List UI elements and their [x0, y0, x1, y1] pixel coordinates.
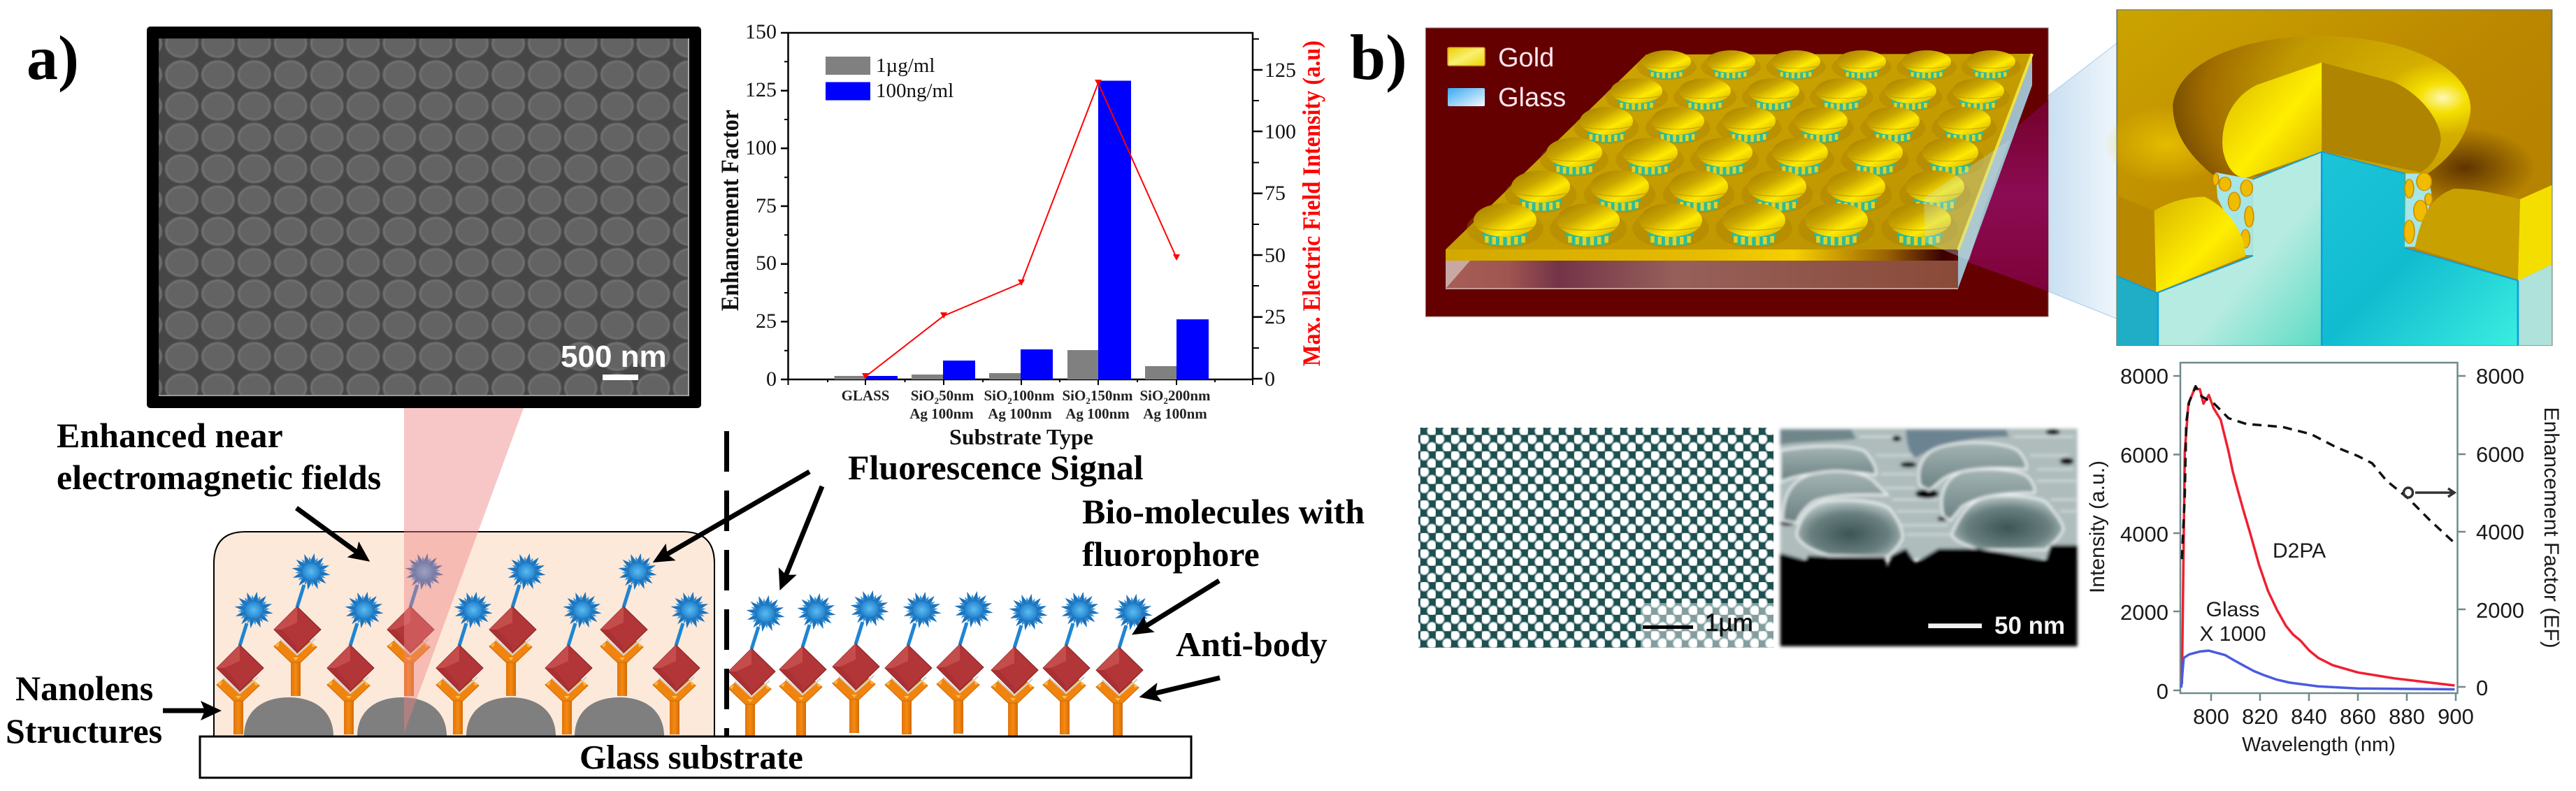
scale text 1 um: 1µm: [1705, 609, 1753, 637]
left axis numbers: 150: [745, 20, 777, 43]
nanolens biosensor schematic: [6, 408, 1365, 778]
legend gold: [1448, 43, 1554, 73]
left axis numbers: 4000: [2120, 522, 2168, 546]
arrow: enhanced fields: [296, 508, 359, 553]
left axis numbers: 50: [756, 252, 777, 275]
glass x 1000 label: Glass: [2206, 598, 2259, 621]
legend glass: [1448, 83, 1566, 113]
glass centre left: [2158, 152, 2322, 345]
right axis numbers: [2476, 364, 2524, 700]
x axis numbers: 840: [2291, 704, 2327, 729]
right axis numbers: [1265, 59, 1296, 391]
category labels: 2: [935, 396, 939, 406]
legend: 100ng/ml: [876, 80, 954, 102]
electric field line: [862, 80, 1180, 379]
category labels: SiO: [911, 387, 935, 404]
label: bio-molecules with fluorophore: Bio-molecules with: [1082, 492, 1365, 531]
x axis numbers: 800: [2193, 704, 2229, 729]
top-view SEM of D2PA: [1418, 428, 1773, 648]
neck left with nanoparticles: [2212, 173, 2254, 255]
bio-molecules on nanolens: [217, 550, 712, 734]
label: enhanced near electromagnetic fields: electromagnetic fields: [57, 458, 381, 497]
label: enhanced near electromagnetic fields: Enhanced near: [57, 416, 283, 455]
lower gold far right: [2518, 185, 2552, 281]
translucent cone origin on plate: [1924, 140, 2010, 261]
D2PA red curve: [2182, 389, 2454, 685]
arrow: anti-body: [1153, 678, 1220, 694]
D2PA label: D2PA: [2273, 539, 2326, 563]
blue zoom cone to inset: [2048, 43, 2117, 319]
category labels: [842, 387, 1211, 422]
right axis numbers: 50: [1265, 244, 1286, 267]
right axis numbers: 75: [1265, 182, 1286, 205]
x axis numbers: 900: [2438, 704, 2474, 729]
x axis numbers: 820: [2242, 704, 2278, 729]
legend glass: Glass: [1498, 83, 1566, 113]
glass front side: [1446, 261, 1958, 289]
nanolens domes: [244, 697, 664, 736]
lower gold right: [2415, 189, 2520, 280]
plot frame and ticks: [2173, 363, 2466, 701]
zoom cone to SEM: [404, 408, 524, 733]
label: bio-molecules with fluorophore: [1082, 492, 1365, 574]
x axis title: Substrate Type: [949, 424, 1093, 449]
right axis title: Max. Electric Field Intensity (a.u): [1297, 41, 1325, 366]
left axis numbers: 125: [745, 78, 777, 101]
glass far right: [2518, 264, 2552, 345]
glass right side: [1958, 54, 2032, 289]
lower gold left front: [2154, 197, 2245, 292]
curves: [2181, 386, 2454, 689]
gold domes: [1467, 50, 2021, 248]
arrow: bio-molecules: [1144, 581, 1219, 627]
left axis numbers: 2000: [2120, 600, 2168, 625]
category labels: Ag 100nm: [909, 405, 974, 422]
category labels: SiO: [984, 387, 1007, 404]
lower gold left side: [2117, 196, 2156, 292]
label: nanolens structures: Nanolens: [15, 669, 153, 708]
bars: [835, 81, 1209, 379]
gold top surface: [1446, 54, 2032, 250]
label: fluorescence signal: Fluorescence Signal: [848, 448, 1144, 487]
category labels: SiO: [1062, 387, 1086, 404]
label: enhanced near electromagnetic fields: [57, 416, 381, 497]
label: nanolens structures: [6, 669, 162, 750]
x axis title: Wavelength (nm): [2242, 734, 2396, 756]
x axis numbers: 880: [2389, 704, 2425, 729]
bio-molecules on glass: [728, 587, 1156, 738]
right axis numbers: 8000: [2476, 364, 2524, 389]
enhanced field region: [214, 532, 714, 736]
right axis numbers: 125: [1265, 59, 1296, 82]
tilted SEM of D2PA pillars: [1780, 428, 2078, 646]
right axis numbers: 25: [1265, 305, 1286, 328]
right axis title: Enhancement Factor (EF): [2540, 407, 2563, 648]
category labels: Ag 100nm: [1143, 405, 1207, 422]
panel a label: a): [27, 24, 79, 93]
3D D2PA plate on red background: [1426, 28, 2048, 317]
category labels: 100nm: [1012, 387, 1055, 404]
dashed divider: [724, 431, 729, 736]
x axis numbers: [2193, 704, 2474, 729]
inset: cross-section of single dome: [2104, 10, 2552, 345]
category labels: 150nm: [1091, 387, 1133, 404]
SEM image of nanolens array: [147, 27, 701, 408]
magenta cone overlay: [1950, 100, 2048, 291]
left axis numbers: 0: [2157, 679, 2168, 704]
glass blue curve: [2181, 651, 2454, 689]
enhancement factor dashed curve: [2182, 386, 2454, 559]
gold front strip: [1446, 249, 1958, 261]
category labels: SiO: [1139, 387, 1163, 404]
right axis numbers: 4000: [2476, 520, 2524, 544]
right axis numbers: 100: [1265, 120, 1296, 143]
category labels: 200nm: [1168, 387, 1211, 404]
glass centre right: [2322, 152, 2518, 345]
surface: [1780, 428, 2078, 559]
category labels: Ag 100nm: [988, 405, 1052, 422]
red background: [1426, 28, 2048, 317]
category labels: 2: [1007, 396, 1012, 406]
rim highlight: [1958, 54, 2032, 250]
bar and line chart: enhancement factor: [716, 20, 1325, 449]
left axis numbers: 25: [756, 310, 777, 333]
scale text 50 nm: 50 nm: [1994, 612, 2065, 639]
right axis numbers: 2000: [2476, 598, 2524, 623]
blue interface lines: [2117, 152, 2518, 345]
left axis title: Intensity (a.u.): [2086, 460, 2109, 593]
axis pointer: [2403, 488, 2454, 498]
gold background: [2117, 10, 2552, 345]
glass substrate: Glass substrate: [580, 738, 803, 776]
plot frame and axes: [781, 33, 1262, 385]
glass x 1000 label: X 1000: [2199, 623, 2266, 646]
glow and shadow: [2104, 105, 2535, 208]
pillars: [1780, 430, 2064, 557]
dome cut right face: [2322, 62, 2441, 173]
big dome: [2173, 36, 2470, 177]
left axis numbers: 0: [766, 368, 777, 391]
dark gaps: [1780, 429, 2074, 525]
left axis numbers: 6000: [2120, 443, 2168, 467]
glass x 1000 label: [2199, 598, 2266, 646]
left axis numbers: 100: [745, 136, 777, 159]
category labels: GLASS: [842, 387, 889, 404]
left axis numbers: [2120, 364, 2168, 704]
left axis numbers: [745, 20, 777, 391]
x axis numbers: 860: [2340, 704, 2376, 729]
right axis numbers: 6000: [2476, 442, 2524, 467]
glass far left: [2117, 276, 2158, 345]
scale bar 1 um: [1643, 625, 1693, 629]
category labels: 2: [1163, 396, 1168, 406]
legend gold: Gold: [1498, 43, 1554, 73]
label: nanolens structures: Structures: [6, 711, 162, 750]
arrow: nanolens: [163, 709, 208, 713]
legend: [826, 55, 954, 102]
dome cut left face: [2222, 62, 2322, 178]
label: anti-body: Anti-body: [1176, 625, 1327, 664]
neck right with nanoparticles: [2404, 173, 2432, 247]
scale bar: [603, 375, 638, 380]
black lower region: [1780, 545, 2078, 646]
left axis title: Enhancement Factor: [716, 110, 744, 311]
category labels: 2: [1086, 396, 1091, 406]
category labels: Ag 100nm: [1065, 405, 1130, 422]
left axis numbers: 75: [756, 194, 777, 217]
panel b label: b): [1350, 22, 1407, 93]
label: bio-molecules with fluorophore: fluorophore: [1082, 535, 1260, 574]
legend: 1µg/ml: [876, 55, 935, 77]
scale text 500 nm: 500 nm: [561, 340, 667, 374]
category labels: 50nm: [939, 387, 974, 404]
right axis numbers: 0: [2476, 676, 2488, 700]
glass substrate: [200, 736, 1191, 778]
left axis numbers: 8000: [2120, 364, 2168, 389]
arrow: fluorescence to nanolens side: [665, 472, 810, 556]
spectrum chart: intensity and enhancement factor: [2086, 363, 2563, 756]
right axis numbers: 0: [1265, 368, 1275, 391]
arrow: fluorescence to glass side: [785, 486, 822, 577]
